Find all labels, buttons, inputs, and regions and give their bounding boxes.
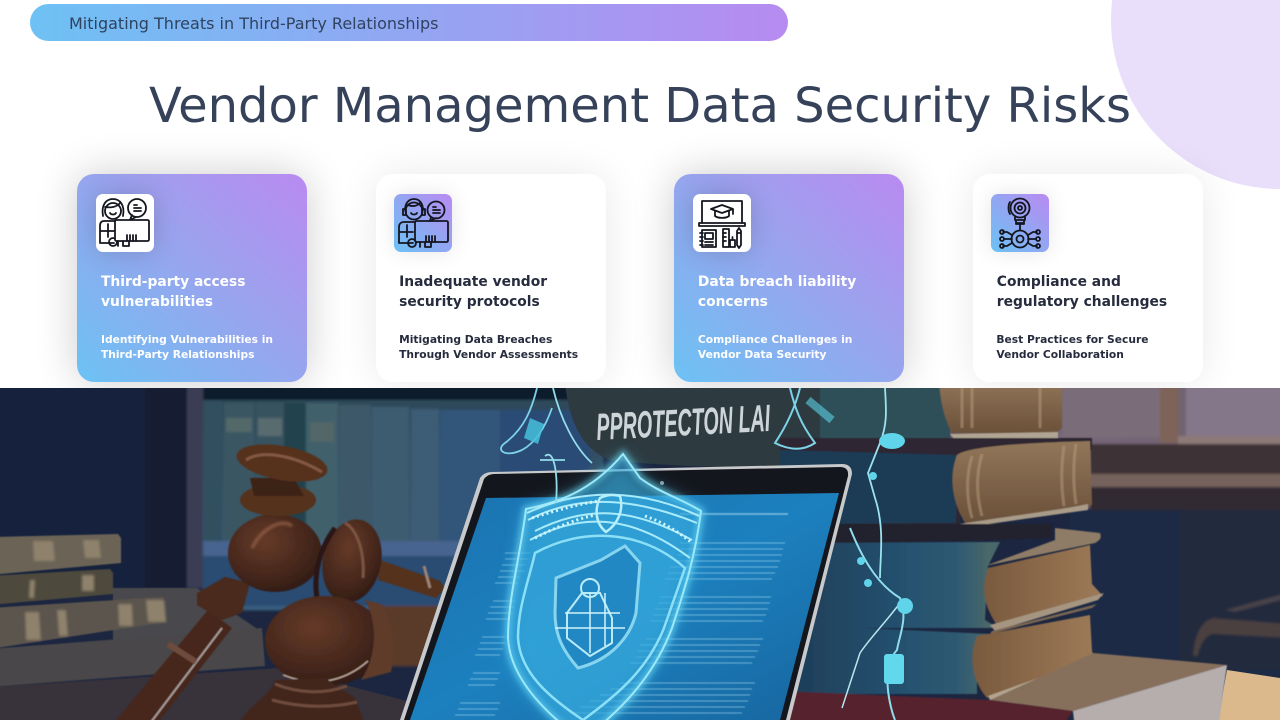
table (0, 668, 1280, 720)
gavel (108, 438, 445, 720)
card heading: vulnerabilities (101, 294, 213, 310)
panel: inadequate protocols (376, 174, 606, 382)
card subtext (399, 333, 578, 361)
card heading: Data breach liability (698, 274, 856, 290)
card subtext: Vendor Collaboration (996, 348, 1124, 361)
circuit scales and cyan wires (501, 388, 913, 720)
card subtext (101, 333, 273, 361)
icon: laptop with graduation cap (693, 194, 751, 252)
card subtext: Best Practices for Secure (996, 333, 1148, 346)
card heading: Compliance and (997, 274, 1121, 290)
icon: woman at computer (96, 194, 154, 252)
left book stack (0, 534, 285, 720)
chair (1193, 592, 1280, 656)
card subtext: Mitigating Data Breaches (399, 333, 552, 346)
laptop (400, 464, 852, 720)
header pill: Mitigating Threats in Third-Party Relationships (69, 14, 438, 33)
card heading: regulatory challenges (997, 294, 1167, 310)
photo: gavel, law books and laptop with glowing shield (0, 388, 1280, 720)
right book stack (780, 378, 1227, 720)
card subtext: Identifying Vulnerabilities in (101, 333, 273, 346)
card subtext: Through Vendor Assessments (399, 348, 578, 361)
card subtext: Third-Party Relationships (101, 348, 254, 361)
card heading: Third-party access (101, 274, 246, 290)
background room (0, 368, 1280, 720)
icon: light bulb with network (991, 194, 1049, 252)
panel: third-party access (77, 174, 307, 382)
panel: breach liability (674, 174, 904, 382)
glowing shield (508, 454, 701, 720)
icon: support agent (394, 194, 452, 252)
dark book behind laptop with engraved text (565, 383, 950, 468)
card heading: Inadequate vendor (399, 274, 547, 290)
card heading: concerns (698, 294, 768, 310)
card heading (698, 274, 856, 310)
card subtext: Compliance Challenges in (698, 333, 852, 346)
panel: compliance challenges (973, 174, 1203, 382)
card heading (399, 274, 548, 310)
decorative circle (1111, 0, 1280, 189)
header pill (30, 4, 788, 41)
card subtext: Vendor Data Security (698, 348, 826, 361)
document text on screen (455, 514, 788, 715)
engraved book title: PPROTECTON LAI (595, 398, 772, 449)
card heading (997, 274, 1167, 310)
card heading (101, 274, 246, 310)
card heading: security protocols (399, 294, 540, 310)
title: Vendor Management Data Security Risks (149, 78, 1131, 134)
card subtext (698, 333, 852, 361)
card subtext (996, 333, 1148, 361)
